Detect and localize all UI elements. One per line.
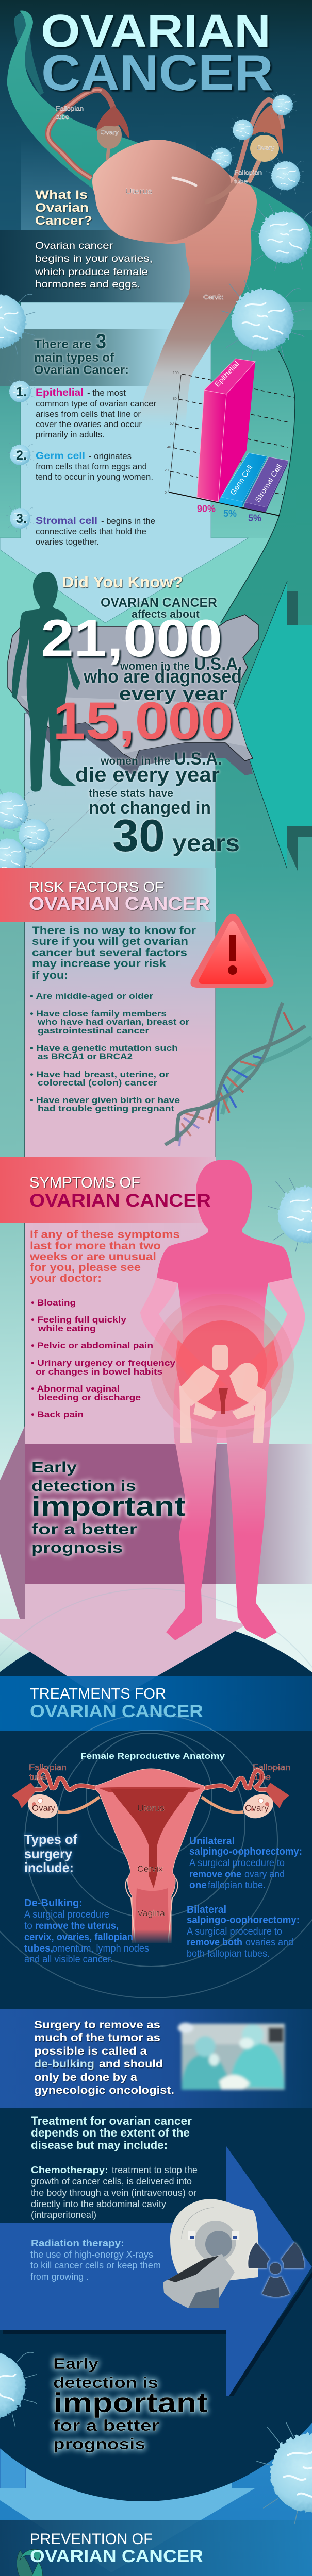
surgery statement text: much of the tumor as: [34, 2032, 160, 2044]
heading: what is ovarian cancer: What Is: [35, 188, 88, 202]
surgery: unilateral: ovary and: [244, 1869, 285, 1880]
surgery statement text: possible is called a: [34, 2045, 147, 2057]
cluster of cancer cells lower left: [0, 787, 55, 882]
heading: there are 3 main types: [34, 330, 129, 377]
symptoms intro paragraph: your doctor:: [30, 1272, 102, 1284]
anatomy heading: Female Reproductive Anatomy: [80, 1751, 225, 1761]
3D bar chart of cancer types: 90%: [197, 504, 216, 515]
anatomy labels on uterus: Ovary: [257, 144, 274, 151]
map of the U.S.A.: [8, 615, 258, 776]
photo: surgeons in theatre: [178, 2023, 285, 2090]
intro paragraph: hormones and eggs.: [35, 279, 140, 290]
symptoms intro paragraph: If any of these symptoms: [30, 1228, 180, 1241]
chemotherapy description: (intraperitoneal): [31, 2210, 96, 2220]
risk factor bullets: • Have had breast, uterine, or: [30, 1070, 169, 1079]
blue band: surgery statement: [0, 2009, 312, 2108]
anatomy labels on uterus: tube: [56, 113, 69, 121]
radiation therapy description: from growing .: [30, 2272, 89, 2282]
statistics text block: not changed in: [89, 798, 211, 818]
statistics text block: 15,000: [53, 691, 234, 750]
treatment intro text: disease but may include:: [31, 2139, 168, 2151]
cancer cell beside silhouette: [268, 1178, 312, 1252]
cancer cells beside callout: [0, 2343, 312, 2524]
blue band: prevention heading: [0, 2520, 312, 2576]
surgery statement text: [34, 2019, 174, 2096]
navy arc lower bulge: [0, 2422, 312, 2501]
type 2 description: [36, 451, 153, 482]
statistics text block: affects about: [132, 608, 200, 620]
background: prevention lower field: [0, 2401, 312, 2576]
anatomy labels: tube: [29, 1772, 47, 1782]
surgery: de-bulking: De-Bulking:: [24, 1897, 83, 1909]
teal awareness ribbon swoop: [7, 11, 312, 361]
icon: radiation symbol: [248, 2242, 304, 2297]
risk intro paragraph: [32, 924, 196, 981]
surgery: bilateral: both fallopian tubes.: [187, 1948, 270, 1959]
chemotherapy description: growth of cancer cells, is delivered into: [31, 2176, 192, 2187]
long centre panel: [25, 713, 216, 1445]
callout: early detection (mauve): prognosis: [31, 1539, 123, 1556]
callout: early detection (mauve): important: [31, 1491, 186, 1522]
surgery: unilateral: A surgical procedure to: [189, 1858, 285, 1869]
upper anatomy: fallopian tubes and ovaries: [48, 90, 283, 197]
surgery: bilateral: A surgical procedure to: [187, 1926, 282, 1937]
type 2 cell number: [6, 442, 34, 468]
surgery: unilateral: [189, 1836, 302, 1891]
symptom bullets: • Abnormal vaginal: [31, 1384, 120, 1394]
background: teal lower field: [0, 538, 312, 1680]
3D bar chart of cancer types: [165, 359, 294, 524]
slate heading block: three main types: [0, 329, 170, 386]
type 3 cell number: [6, 505, 34, 532]
symptom bullets: • Pelvic or abdominal pain: [31, 1341, 153, 1350]
heading: there are 3 main types: Ovarian Cancer:: [34, 363, 129, 377]
callout: early detection (navy): [53, 2354, 208, 2453]
type 3 description: [36, 516, 155, 547]
heading: types of surgery: Types of: [24, 1832, 77, 1847]
mauve band behind early detection: [25, 1444, 216, 1584]
treatment intro text: Treatment for ovarian cancer: [31, 2114, 192, 2127]
heading: there are 3 main types: main types of: [34, 351, 114, 365]
symptoms intro paragraph: for you, please see: [30, 1261, 141, 1274]
heading: prevention: PREVENTION OF: [30, 2531, 153, 2548]
risk factor bullets: • Are middle-aged or older: [30, 991, 153, 1001]
navy section background: [0, 1731, 312, 2401]
3D bar chart of cancer types: Stromal Cell: [253, 463, 283, 504]
surgery: unilateral: fallopian tube.: [208, 1880, 266, 1891]
chemotherapy description: directly into the abdominal cavity: [31, 2199, 166, 2209]
surgery: de-bulking: [24, 1897, 149, 1965]
surgery: de-bulking: remove the uterus,: [35, 1921, 119, 1931]
anatomy labels: Vagina: [137, 1908, 166, 1918]
anatomy labels on uterus: tube: [234, 178, 248, 185]
heading: treatments: OVARIAN CANCER: [30, 1702, 203, 1721]
type 1 description: cover the ovaries and occur: [36, 419, 142, 429]
treatment intro text: depends on the extent of the: [31, 2126, 190, 2139]
chemotherapy description: Chemotherapy:: [31, 2165, 108, 2175]
callout: early detection (mauve): Early: [31, 1459, 77, 1476]
statistics text block: women in the: [100, 755, 170, 767]
surgery: de-bulking: cervix, ovaries, fallopian: [24, 1932, 133, 1943]
concentric rings: [0, 1589, 312, 1998]
type 2 description: Germ cell: [36, 451, 85, 462]
type 1 description: primarily in adults.: [36, 430, 105, 439]
icon: warning triangle: [190, 914, 274, 988]
symptoms intro paragraph: weeks or are unusual: [29, 1250, 156, 1263]
type 2 cell number: 2.: [16, 448, 27, 463]
callout: early detection (mauve): detection is: [31, 1478, 136, 1495]
3D bar chart of cancer types: 60: [170, 422, 174, 426]
surgery: bilateral: ovaries and: [245, 1937, 293, 1948]
heading: risk factors: [29, 879, 210, 914]
bright teal left pointing arrow: [234, 581, 312, 871]
heading: types of surgery: [24, 1832, 77, 1875]
heading: there are 3 main types: There are: [34, 337, 91, 351]
anatomy labels on uterus: Uterus: [125, 187, 152, 196]
3D bar chart of cancer types: Epithelial: [212, 360, 240, 388]
callout: early detection (navy): Early: [53, 2354, 99, 2372]
heading: there are 3 main types: 3: [96, 330, 106, 353]
heading: types of surgery: surgery: [24, 1846, 73, 1861]
chemotherapy description: [31, 2165, 198, 2220]
risk factor bullets: who have had ovarian, breast or: [37, 1017, 189, 1027]
type 1 cell number: [6, 378, 35, 405]
type 3 description: - begins in the: [101, 516, 155, 526]
radiation therapy description: [30, 2238, 161, 2282]
intro paragraph: Ovarian cancer: [35, 241, 113, 251]
statistics text block: women in the: [120, 660, 190, 672]
symptoms intro paragraph: last for more than two: [30, 1240, 161, 1252]
dark panel: what is ovarian cancer text: [0, 230, 196, 302]
heading: prevention: OVARIAN CANCER: [30, 2547, 203, 2566]
type 1 description: [36, 387, 156, 439]
3D bar chart of cancer types: 100: [173, 371, 179, 375]
3D bar chart of cancer types: 40: [167, 446, 171, 449]
risk intro paragraph: if you:: [32, 969, 68, 981]
mauve band right fade: [216, 1444, 312, 1584]
dark teal curved field at right: [216, 330, 312, 1674]
surgery: unilateral: one: [189, 1880, 207, 1891]
symptoms intro paragraph: [29, 1228, 180, 1284]
risk factor bullets: • Have a genetic mutation such: [30, 1043, 178, 1053]
left column behind arrow: [0, 302, 21, 538]
cancer cells around the uterus, back layer: [208, 92, 297, 172]
statistics text block: every year: [119, 683, 227, 704]
anatomy labels on uterus: [56, 105, 274, 301]
risk factor bullets: had trouble getting pregnant: [38, 1104, 174, 1113]
red bar: risk factors: [0, 868, 216, 922]
blue arrow with shadow: [0, 2146, 312, 2402]
light blue arrow: [0, 2421, 255, 2572]
awareness ribbon: [4, 2549, 62, 2576]
intro paragraph: begins in your ovaries,: [35, 253, 153, 264]
chemotherapy description: treatment to stop the: [112, 2165, 198, 2175]
type 3 description: ovaries together.: [36, 537, 99, 547]
heading: symptoms: OVARIAN CANCER: [29, 1191, 211, 1211]
surgery: de-bulking: omentum, lymph nodes: [52, 1943, 149, 1954]
3D bar chart of cancer types: 5%: [248, 513, 261, 524]
heading: prevention: [30, 2531, 203, 2566]
navy arc: [0, 2396, 312, 2501]
risk factor bullets: colorectal (colon) cancer: [38, 1078, 157, 1088]
chemotherapy description: the body through a vein (intravenous) or: [31, 2188, 196, 2198]
pink woman silhouette with pelvis overlay: [140, 1160, 305, 1640]
3D bar chart of cancer types: 20: [165, 469, 169, 472]
statistics text block: who are diagnosed: [83, 666, 242, 687]
anatomy labels: tube: [253, 1772, 271, 1782]
surgery statement text: and should: [99, 2058, 163, 2070]
anatomy labels: Ovary: [32, 1803, 55, 1813]
callout: early detection (navy): prognosis: [53, 2435, 145, 2453]
blue band: treatments heading: [0, 1676, 312, 1731]
woman silhouette: [12, 572, 80, 792]
left block behind light arrow: [0, 2421, 26, 2488]
statistics text block: these stats have: [89, 787, 173, 800]
anatomy labels on uterus: Cervix: [203, 293, 224, 301]
anatomy labels: [29, 1762, 290, 1918]
surgery: bilateral: salpingo-oophorectomy:: [187, 1914, 300, 1926]
statistics text block: OVARIAN CANCER: [101, 596, 217, 610]
anatomy labels on uterus: Ovary: [101, 129, 119, 136]
surgery statement text: de-bulking: [34, 2058, 94, 2070]
anatomy labels on uterus: Fallopian: [234, 169, 262, 176]
symptom bullets: or changes in bowel habits: [36, 1367, 162, 1377]
type 1 description: common type of ovarian cancer: [36, 399, 156, 409]
anatomy labels: Ovary: [245, 1803, 269, 1813]
anatomy labels: Uterus: [137, 1803, 165, 1813]
heading: risk factors: RISK FACTORS OF: [29, 879, 164, 895]
main title: CANCER: [41, 44, 273, 101]
background: header and uterus area: [0, 0, 312, 309]
risk intro paragraph: cancer but several factors: [32, 946, 187, 959]
3D bar chart of cancer types: 80: [173, 397, 177, 401]
anatomy labels on uterus: Fallopian: [56, 105, 84, 112]
surgery: bilateral: remove both: [187, 1937, 242, 1948]
anatomy labels: Fallopian: [253, 1762, 290, 1772]
surgery: unilateral: remove one: [189, 1869, 241, 1880]
statistics text block: U.S.A.: [174, 749, 222, 769]
heading: what is ovarian cancer: Ovarian: [35, 201, 89, 215]
intro paragraph: which produce female: [35, 267, 148, 278]
radiation therapy machine: [163, 2199, 258, 2308]
heading: symptoms: [29, 1174, 211, 1211]
radiation therapy description: to kill cancer cells or keep them: [30, 2260, 161, 2270]
callout: early detection (navy): important: [53, 2387, 208, 2418]
risk factor bullets: • Have close family members: [30, 1009, 167, 1019]
symptom bullets: • Urinary urgency or frequency: [31, 1358, 176, 1368]
symptom bullets: • Bloating: [31, 1298, 76, 1308]
surgery statement text: Surgery to remove as: [34, 2019, 160, 2031]
surgery: unilateral: Unilateral: [189, 1836, 235, 1847]
lighter column behind what-is heading: [21, 139, 196, 230]
risk intro paragraph: may increase your risk: [32, 957, 166, 970]
callout: early detection (mauve): [31, 1459, 186, 1556]
type 2 description: tend to occur in young women.: [36, 472, 153, 482]
mauve arrow edge at left: [0, 1426, 25, 1635]
surgery: de-bulking: A surgical procedure: [24, 1909, 109, 1920]
type 1 description: - the most: [87, 388, 126, 398]
type 1 description: Epithelial: [36, 387, 84, 398]
radiation therapy description: the use of high-energy X-rays: [30, 2249, 153, 2260]
right column behind arrow: [196, 302, 312, 538]
risk factor bullets: as BRCA1 or BRCA2: [38, 1052, 133, 1061]
treatment intro text: [31, 2114, 192, 2151]
surgery: de-bulking: and all visible cancer.: [24, 1954, 113, 1965]
symptom bullets: [31, 1298, 176, 1419]
heading: treatments: [30, 1686, 203, 1721]
surgery: unilateral: salpingo-oophorectomy:: [189, 1846, 302, 1857]
3D bar chart of cancer types: 0: [165, 491, 167, 495]
heading: symptoms: SYMPTOMS OF: [29, 1174, 140, 1191]
type 1 description: arises from cells that line or: [36, 409, 141, 419]
surgery: de-bulking: to: [24, 1921, 32, 1931]
callout: early detection (navy): detection is: [53, 2374, 158, 2392]
anatomy labels: Cervix: [137, 1864, 163, 1874]
3D bar chart of cancer types: 5%: [223, 509, 237, 519]
risk factor bullets: • Have never given birth or have: [30, 1095, 180, 1105]
heading: what is ovarian cancer: [35, 188, 92, 228]
DNA helix: [165, 1003, 311, 1146]
main title: OVARIAN: [41, 6, 271, 57]
navy dome: [0, 1618, 312, 2123]
type 3 description: Stromal cell: [36, 516, 97, 527]
surgery: bilateral: Bilateral: [187, 1904, 226, 1916]
intro paragraph: [35, 241, 153, 290]
heading: types of surgery: include:: [24, 1860, 74, 1875]
type 2 description: - originates: [89, 451, 132, 461]
symptom bullets: bleeding or discharge: [38, 1393, 141, 1402]
risk intro paragraph: sure if you will get ovarian: [32, 935, 188, 947]
statistics text block: [41, 596, 242, 861]
surgery: de-bulking: tubes,: [24, 1943, 53, 1954]
3D bar chart of cancer types: Germ Cell: [228, 464, 254, 497]
symptom bullets: while eating: [38, 1324, 96, 1333]
statistics text block: U.S.A.: [194, 654, 242, 674]
pale pink down arrow: [0, 1584, 247, 1704]
heading: treatments: TREATMENTS FOR: [30, 1686, 166, 1702]
statistics text block: die every year: [75, 764, 220, 786]
female reproductive anatomy diagram: [12, 1769, 289, 1945]
symptom bullets: • Feeling full quickly: [31, 1315, 127, 1325]
heading: risk factors: OVARIAN CANCER: [29, 894, 210, 914]
statistics text block: years: [172, 829, 240, 856]
light blue down arrow: [0, 302, 249, 623]
radiation therapy description: Radiation therapy:: [31, 2238, 124, 2248]
statistics text block: 30: [112, 810, 165, 861]
Did You Know heading: Did You Know?: [62, 573, 183, 591]
cancer cells at right of uterus: [0, 157, 312, 360]
callout: early detection (mauve): for a better: [31, 1521, 137, 1538]
symptom bullets: • Back pain: [31, 1410, 84, 1419]
surgery statement text: only be done by a: [34, 2072, 137, 2083]
statistics text block: 21,000: [41, 609, 222, 668]
type 3 cell number: 3.: [16, 512, 27, 526]
red bar: symptoms: [0, 1157, 216, 1223]
anatomy labels: Fallopian: [29, 1762, 67, 1772]
surgery: bilateral: [187, 1904, 300, 1959]
uterus illustration: [92, 140, 257, 436]
heading: what is ovarian cancer: Cancer?: [35, 214, 92, 228]
type 2 description: from cells that form eggs and: [36, 462, 147, 471]
type 3 description: connective cells that hold the: [36, 527, 146, 536]
surgery statement text: gynecologic oncologist.: [34, 2084, 174, 2096]
risk intro paragraph: There is no way to know for: [32, 924, 196, 937]
risk factor bullets: [30, 991, 189, 1113]
main title: [41, 6, 273, 101]
type 1 cell number: 1.: [16, 385, 27, 399]
callout: early detection (navy): for a better: [53, 2416, 159, 2434]
risk factor bullets: gastrointestinal cancer: [38, 1026, 149, 1036]
